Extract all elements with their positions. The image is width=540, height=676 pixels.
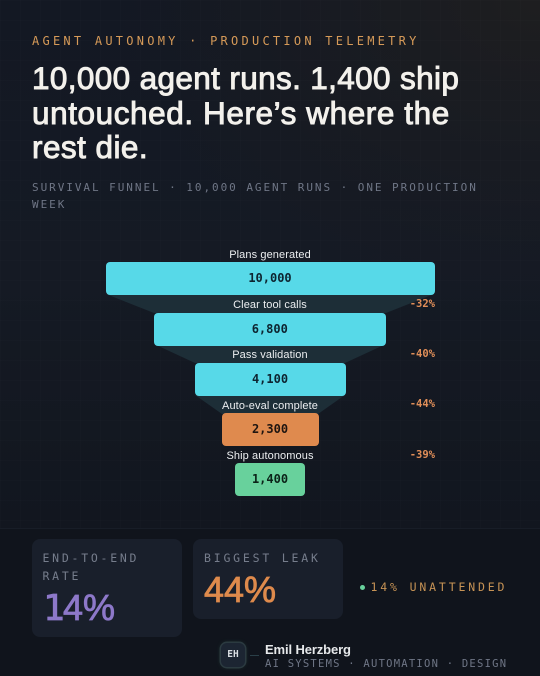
bar: 4,100 <box>194 363 346 396</box>
stage label: plans generated: Plans generated <box>229 249 311 261</box>
stat card: end-to-end rate <box>32 539 182 637</box>
bar: 6,800: 6,800 <box>252 322 288 336</box>
footer band <box>0 528 540 676</box>
unattended badge <box>360 580 507 594</box>
title <box>32 60 459 165</box>
subtitle <box>32 181 478 210</box>
stage label: clear tool calls: Clear tool calls <box>233 299 307 311</box>
title: untouched. Here’s where the <box>32 94 450 130</box>
card label: END-TO-END <box>42 550 139 564</box>
drop: -44%: -44% <box>410 398 435 410</box>
bar: 1,400: 1,400 <box>252 472 288 486</box>
drop: -40%: -40% <box>410 348 435 360</box>
bar: 10,000: 10,000 <box>248 271 292 285</box>
stage label: auto-eval complete: Auto-eval complete <box>222 400 318 412</box>
funnel chart <box>106 249 435 496</box>
card label: RATE <box>42 568 81 582</box>
bar: 6,800 <box>154 312 386 346</box>
card label: BIGGEST LEAK <box>204 550 321 564</box>
bar: 1,400 <box>235 463 305 496</box>
bar: 2,300 <box>222 413 318 446</box>
author name: Emil Herzberg <box>265 642 351 657</box>
title: 10,000 agent runs. 1,400 ship <box>32 60 459 96</box>
bar: 4,100: 4,100 <box>252 372 288 386</box>
stage label: pass validation: Pass validation <box>232 349 308 361</box>
author avatar <box>221 643 245 667</box>
drop: -39%: -39% <box>410 449 435 461</box>
badge text: 14% UNATTENDED <box>370 580 507 594</box>
drop: -32%: -32% <box>410 298 435 310</box>
avatar connector <box>250 655 259 656</box>
stat card: biggest leak <box>193 539 343 619</box>
card value: 44% <box>204 569 276 610</box>
subtitle: SURVIVAL FUNNEL · 10,000 AGENT RUNS · ONE PRODUCTION <box>32 181 478 194</box>
eyebrow: AGENT AUTONOMY · PRODUCTION TELEMETRY <box>32 34 420 48</box>
card value: 14% <box>43 587 115 629</box>
stage label: ship autonomous: Ship autonomous <box>226 450 314 462</box>
author avatar: EH <box>227 649 239 660</box>
status dot <box>360 585 364 590</box>
title: rest die. <box>32 129 148 165</box>
bar: 10,000 <box>106 262 434 295</box>
subtitle: WEEK <box>32 198 66 210</box>
card label <box>42 550 139 582</box>
bar: 2,300: 2,300 <box>252 422 288 436</box>
author tagline: AI SYSTEMS · AUTOMATION · DESIGN <box>265 658 507 670</box>
